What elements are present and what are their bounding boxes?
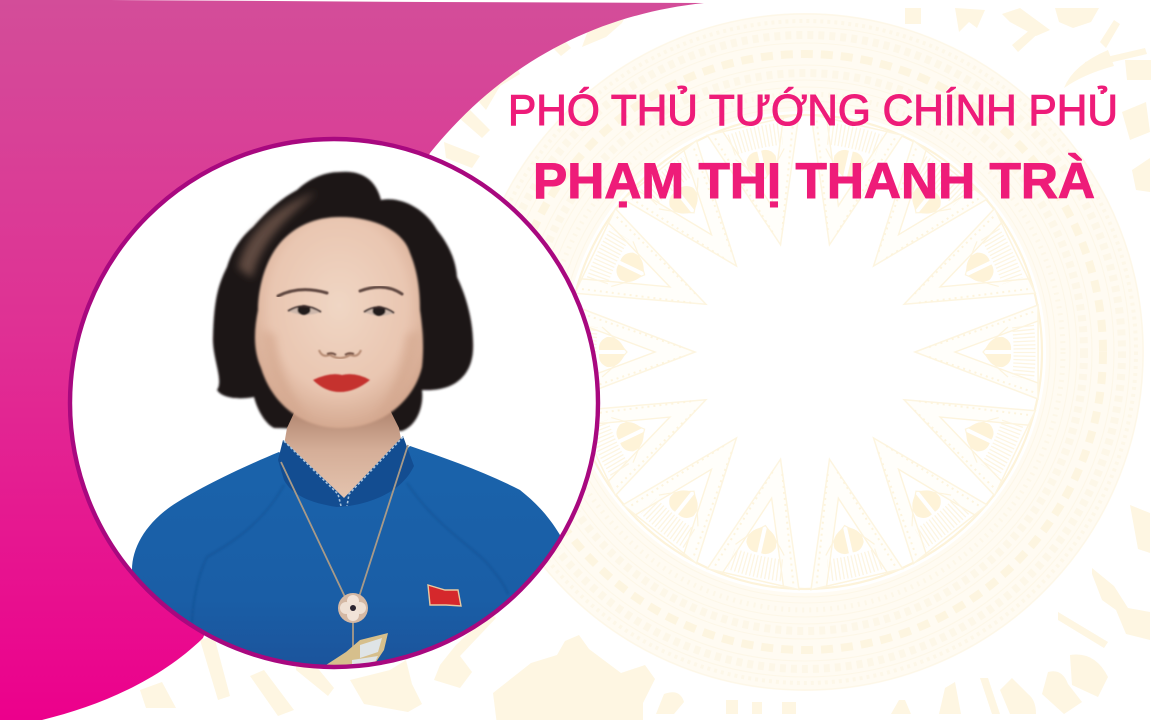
eyes <box>288 305 394 316</box>
necklace <box>281 445 408 660</box>
bronze drum pattern <box>467 14 1143 690</box>
eyebrows <box>278 287 402 296</box>
pendant <box>338 593 368 623</box>
brooch <box>326 633 388 668</box>
dress seams <box>206 484 487 564</box>
flag pin <box>428 585 461 606</box>
portrait border <box>70 139 598 667</box>
heading: title: PHÓ THỦ TƯỚNG CHÍNH PHỦ <box>508 84 1118 135</box>
bottom left figures <box>493 635 655 720</box>
face <box>255 217 423 428</box>
lips <box>313 374 370 392</box>
portrait photo <box>132 172 560 700</box>
face shading <box>264 332 416 391</box>
top right figures <box>905 8 1099 36</box>
portrait circle <box>70 139 598 700</box>
collar trim <box>284 437 403 506</box>
hair <box>213 172 473 431</box>
heading: name: PHẠM THỊ THANH TRÀ <box>533 153 1095 209</box>
nose <box>319 350 361 358</box>
collar <box>278 436 414 507</box>
panel: pink curved background <box>0 0 704 720</box>
right edge figures <box>1092 505 1150 640</box>
neck <box>284 411 401 498</box>
dress <box>132 446 560 665</box>
hair highlight <box>238 192 316 278</box>
top left figures <box>545 15 626 56</box>
